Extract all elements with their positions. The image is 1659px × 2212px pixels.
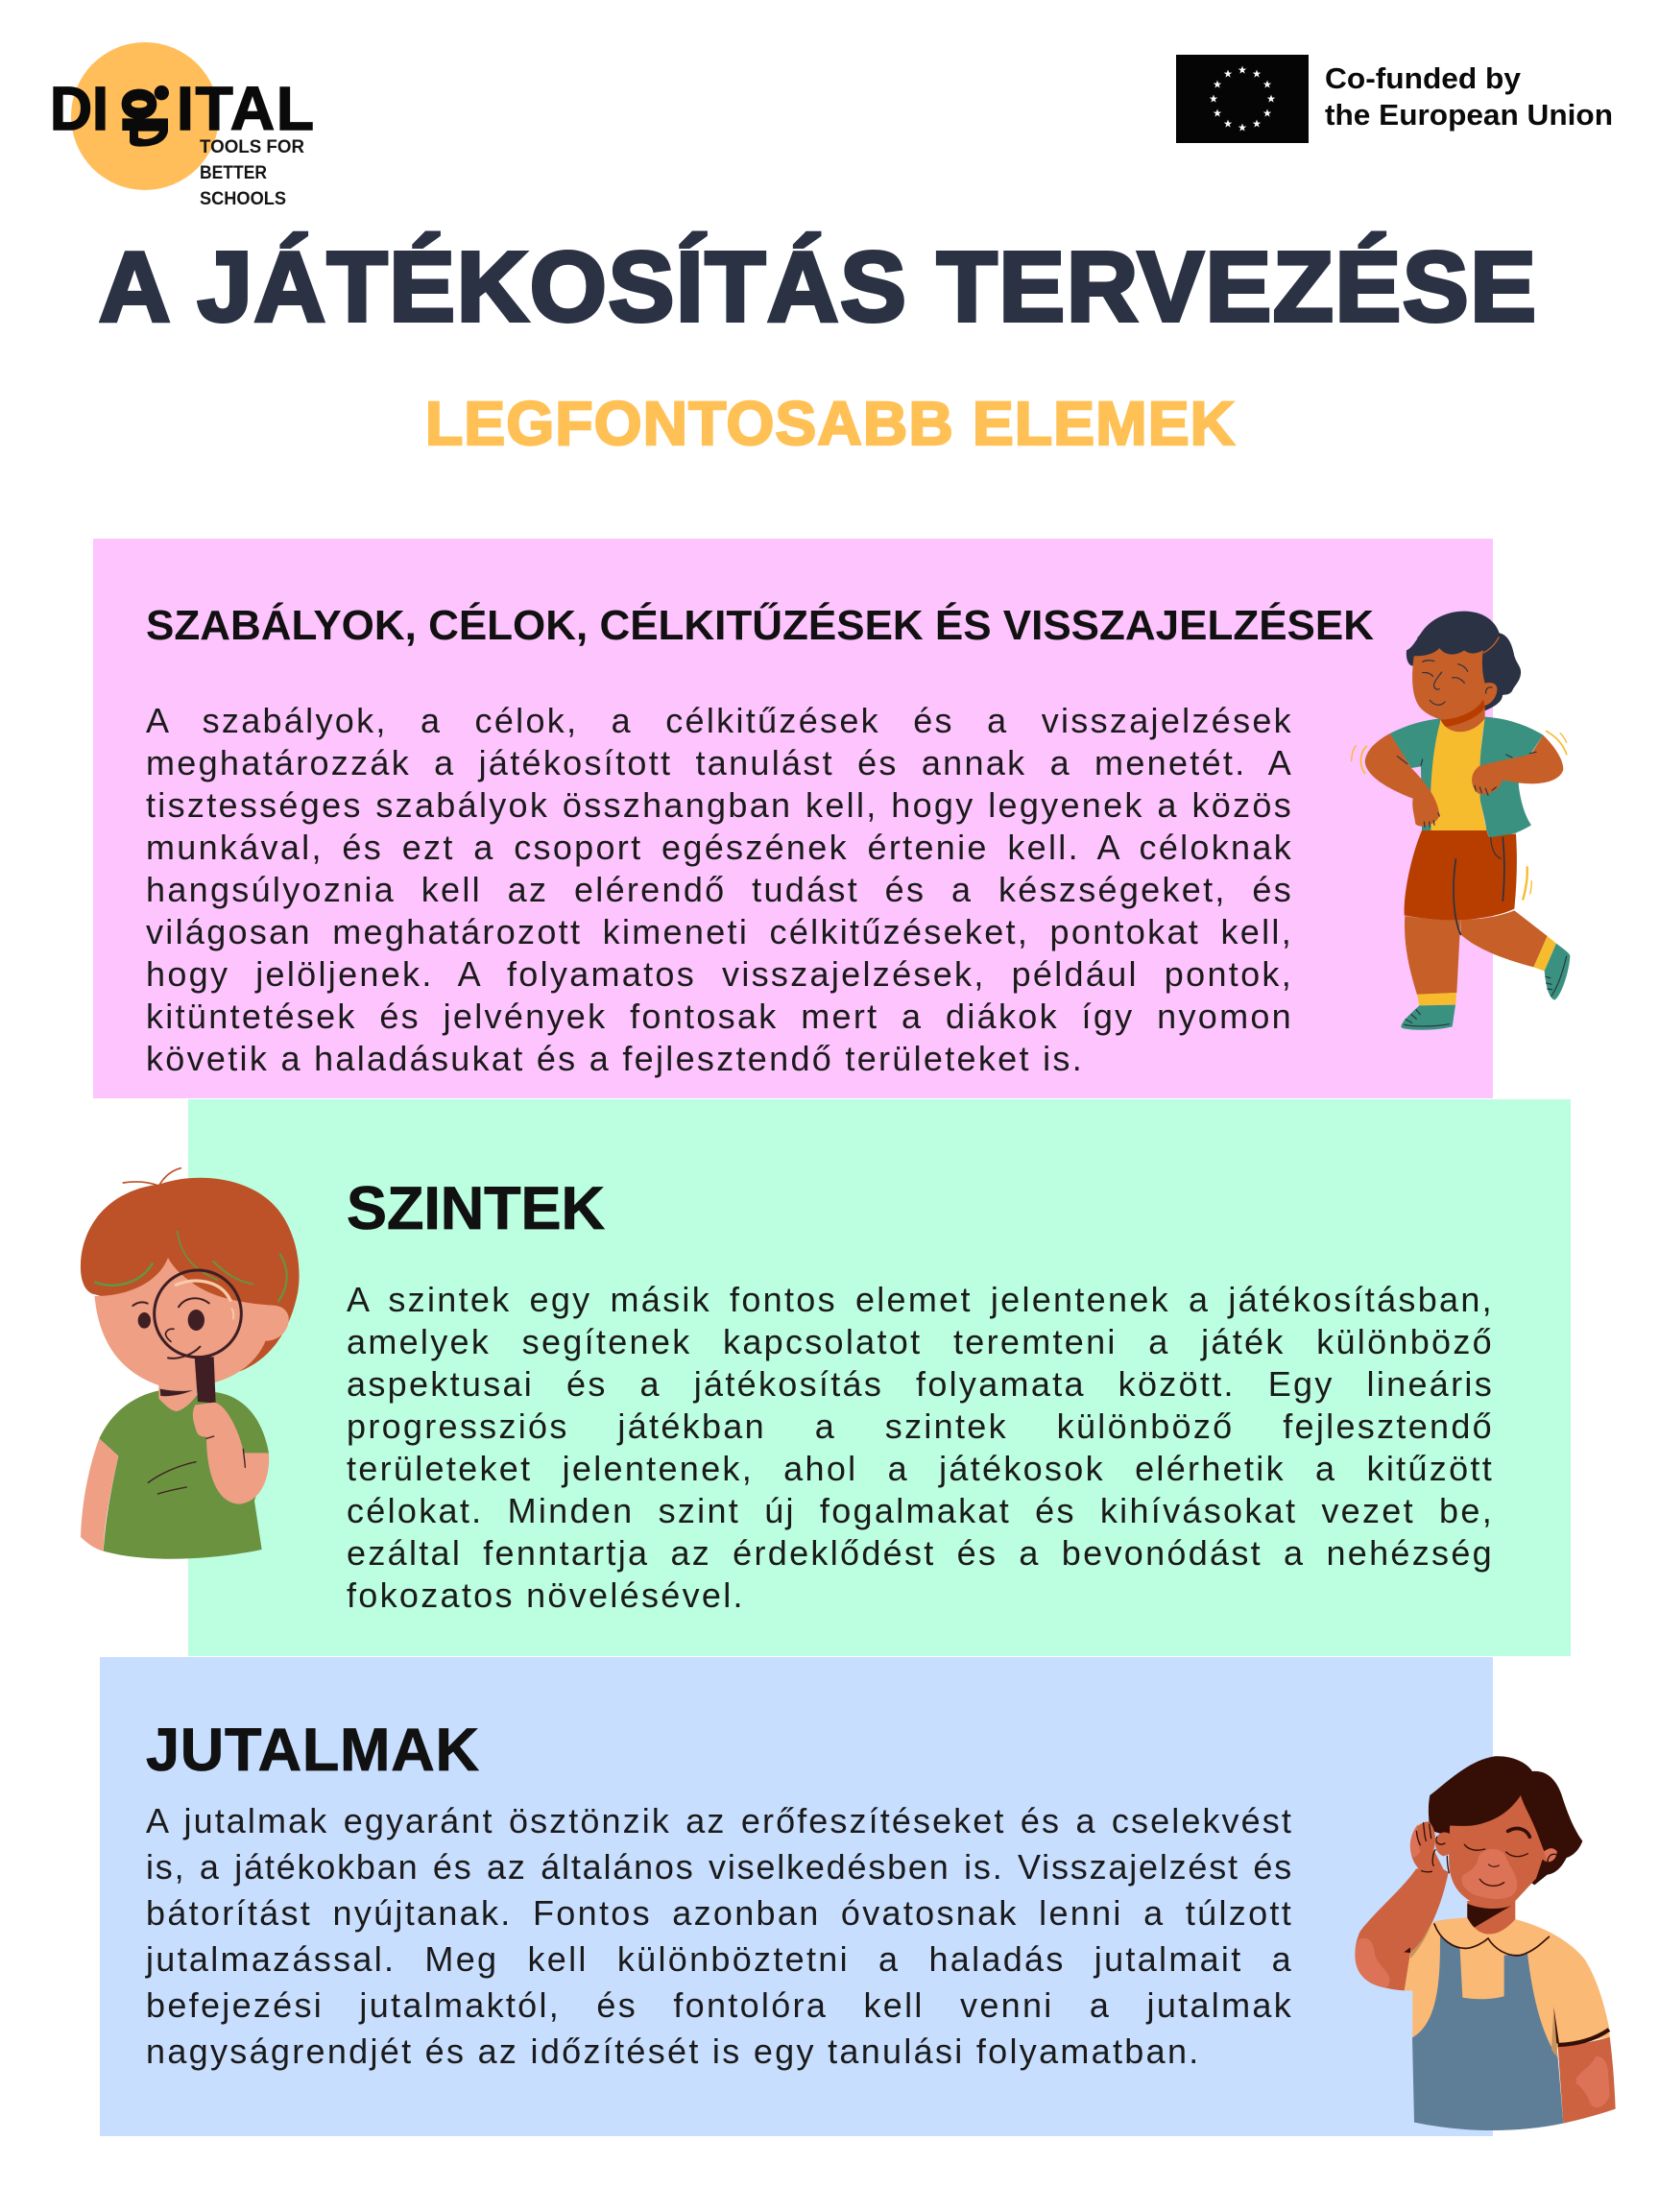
heading: levels: SZINTEK	[347, 1175, 605, 1242]
title: A JÁTÉKOSÍTÁS TERVEZÉSE	[99, 231, 1536, 342]
illustration: child listening	[1355, 1756, 1616, 2130]
text block: rules paragraph: kitüntetések és jelvények fontosak mert a diákok így nyomon	[146, 997, 1293, 1036]
illustration: child with magnifying glass	[81, 1167, 300, 1559]
text block: rewards paragraph: befejezési jutalmaktól, és fontolóra kell venni a jutalmak	[146, 1985, 1293, 2025]
text block: levels paragraph: A szintek egy másik fontos elemet jelentenek a játékosításban,	[347, 1279, 1494, 1319]
text block: rules paragraph: tisztességes szabályok összhangban kell, hogy legyenek a közös	[146, 785, 1293, 825]
text block: levels paragraph: progressziós játékban a szintek különböző fejlesztendő	[347, 1407, 1494, 1446]
text block: rewards paragraph: A jutalmak egyaránt ösztönzik az erőfeszítéseket és a cselekvést	[146, 1801, 1293, 1839]
text block: rules paragraph: világosan meghatározott kimeneti célkitűzéseket, pontokat kell,	[146, 912, 1293, 951]
heading: rewards: JUTALMAK	[146, 1717, 479, 1784]
text block: rules paragraph: hogy jelöljenek. A folyamatos visszajelzések, például pontok,	[146, 954, 1293, 994]
logo: Digital Tools for Better Schools: TOOLS FOR	[200, 137, 304, 157]
text block: rules paragraph: hangsúlyoznia kell az elérendő tudást és a készségeket, és	[146, 870, 1293, 909]
text block: rewards paragraph: nagyságrendjét és az időzítését is egy tanulási folyamatban.	[146, 2032, 1201, 2071]
text block: rules paragraph	[146, 701, 1293, 1078]
heading: rules, goals, objectives and feedback: SZABÁLYOK, CÉLOK, CÉLKITŰZÉSEK ÉS VISSZAJELZÉSEK	[146, 601, 1374, 649]
text block: levels paragraph: aspektusai és a játékosítás folyamata között. Egy lineáris	[347, 1364, 1494, 1404]
illustration: dancing child	[1351, 611, 1571, 1030]
subtitle: LEGFONTOSABB ELEMEK	[425, 389, 1235, 458]
panel: rules, goals and feedback background	[93, 539, 1493, 1098]
text block: rules paragraph: meghatározzák a játékosított tanulást és annak a menetét. A	[146, 743, 1293, 782]
panel: levels background	[188, 1099, 1571, 1656]
text block: levels paragraph: fokozatos növelésével.	[347, 1575, 745, 1615]
text block: levels paragraph	[347, 1279, 1494, 1615]
text block: levels paragraph: amelyek segítenek kapcsolatot teremteni a játék különböző	[347, 1322, 1494, 1361]
logo: EU flag	[1176, 55, 1309, 143]
logo: Digital Tools for Better Schools: ITAL	[177, 74, 314, 143]
text block: rules paragraph: követik a haladásukat és a fejlesztendő területeket is.	[146, 1039, 1084, 1078]
text block: levels paragraph: területeket jelentenek, ahol a játékosok elérhetik a kitűzött	[347, 1449, 1494, 1488]
text: Co-funded by the European Union	[1325, 61, 1613, 132]
text block: levels paragraph: ezáltal fenntartja az érdeklődést és a bevonódást a nehézség	[347, 1533, 1494, 1573]
text block: rewards paragraph: bátorítást nyújtanak. Fontos azonban óvatosnak lenni a túlzott	[146, 1893, 1293, 1933]
logo: Digital Tools for Better Schools	[50, 42, 314, 209]
text block: rules paragraph: munkával, és ezt a csoport egészének értenie kell. A céloknak	[146, 828, 1293, 867]
text: Co-funded by the European Union: Co-funded by	[1325, 61, 1522, 95]
text block: rewards paragraph: is, a játékokban és az általános viselkedésben is. Visszajelzést és	[146, 1847, 1293, 1887]
text block: rewards paragraph: jutalmazással. Meg kell különböztetni a haladás jutalmait a	[146, 1939, 1293, 1979]
text block: rules paragraph: A szabályok, a célok, a célkitűzések és a visszajelzések	[146, 701, 1293, 739]
text block: rewards paragraph	[145, 1801, 1293, 2071]
panel: rewards background	[100, 1657, 1493, 2136]
text: Co-funded by the European Union: the European Union	[1325, 98, 1613, 132]
logo: Digital Tools for Better Schools: BETTER	[200, 163, 267, 183]
logo: Digital Tools for Better Schools: SCHOOLS	[200, 189, 286, 209]
logo: Digital Tools for Better Schools: DI	[50, 74, 108, 143]
text block: levels paragraph: célokat. Minden szint új fogalmakat és kihívásokat vezet be,	[347, 1491, 1494, 1530]
